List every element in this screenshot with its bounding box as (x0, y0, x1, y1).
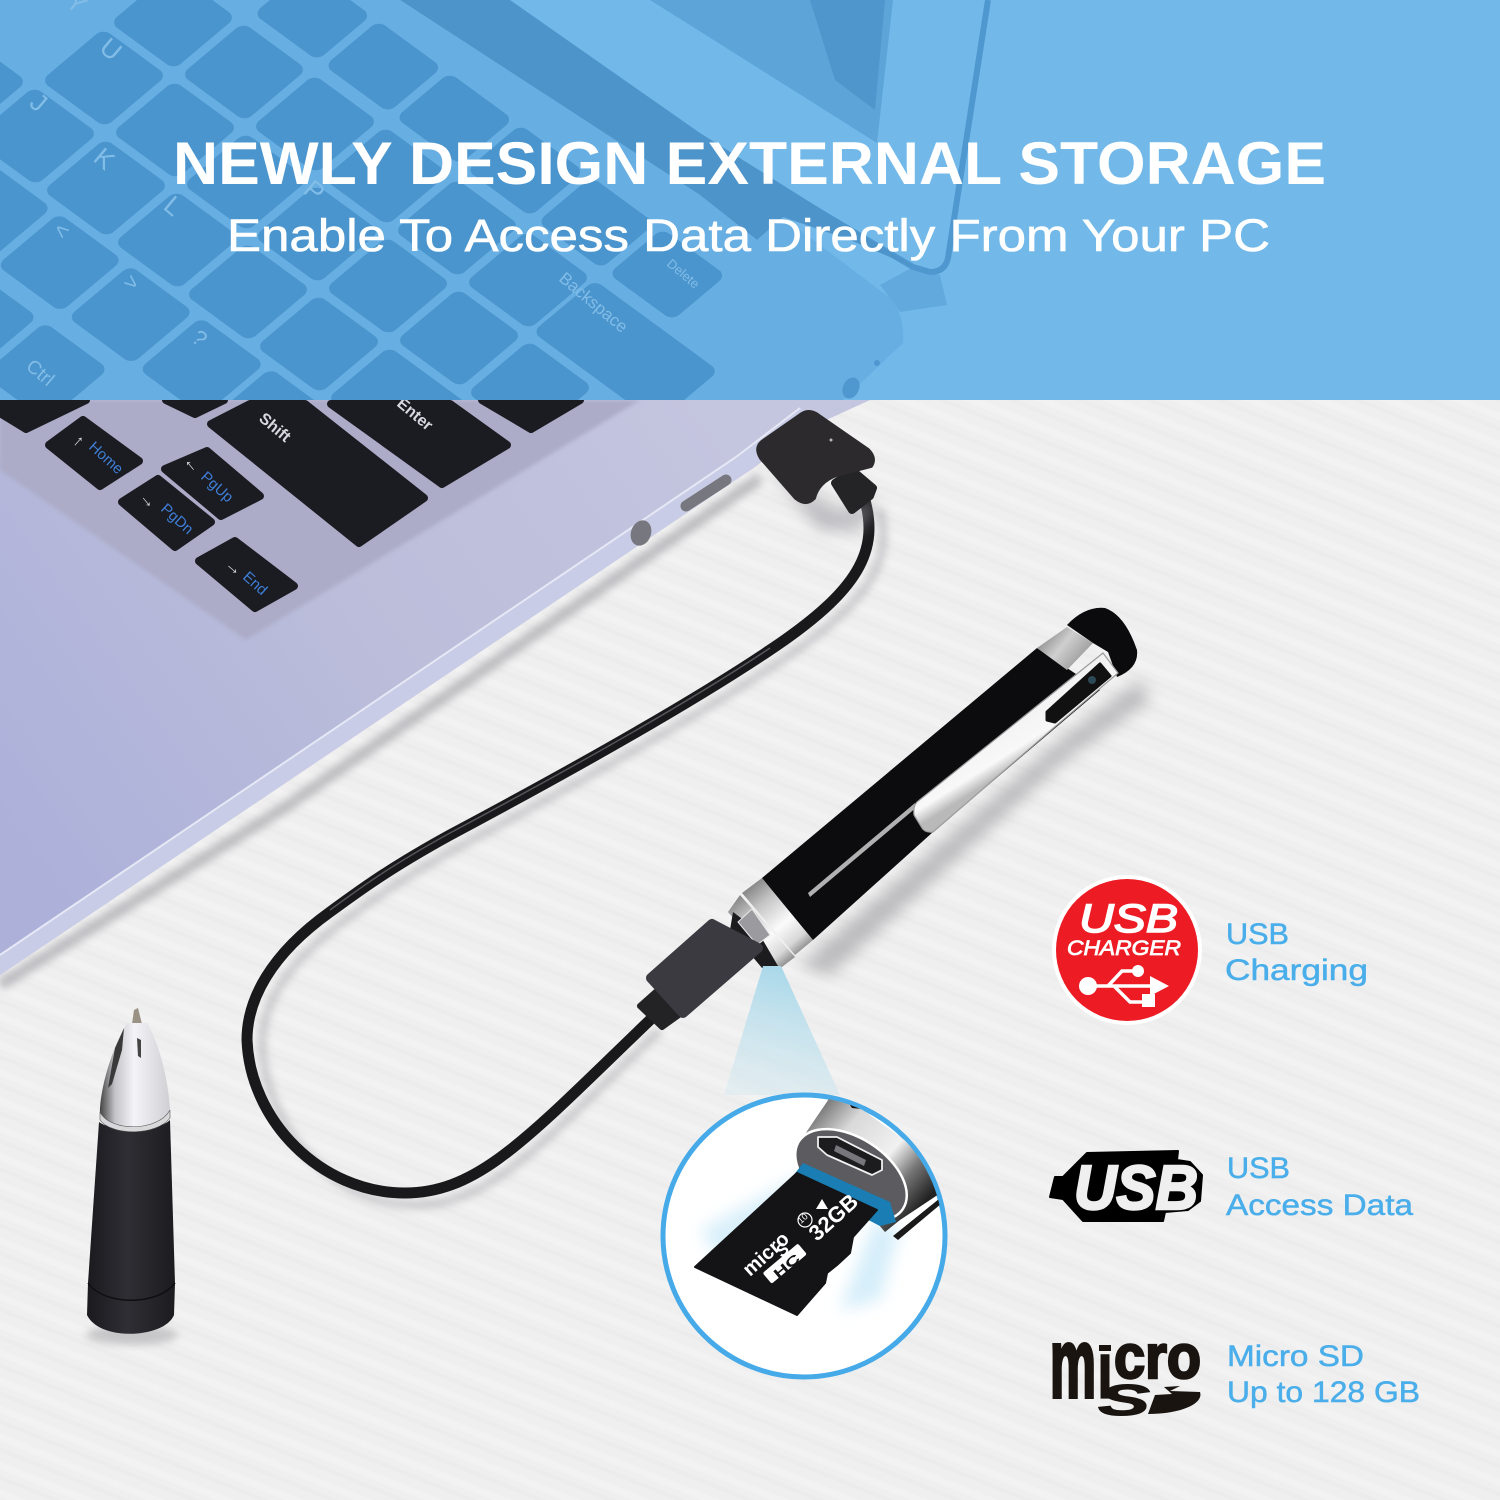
hinge shadow (400, 0, 913, 267)
HC badge (763, 1243, 807, 1284)
micro sd card: S (772, 1239, 794, 1261)
laptop screen (650, 0, 893, 143)
micro sd card (695, 1173, 877, 1315)
silver ring (742, 878, 813, 955)
spy pen body (728, 608, 1150, 975)
key legends: < (49, 217, 75, 244)
zoom beam (724, 966, 840, 1095)
label: USB charging: Charging (1225, 954, 1368, 987)
key labels: End (239, 568, 271, 599)
label: micro SD: Micro SD (1227, 1340, 1364, 1373)
cable highlight (330, 648, 770, 910)
clip slot (1047, 664, 1110, 722)
chrome cone (100, 1023, 170, 1133)
connector body (758, 412, 873, 502)
label: micro SD (1227, 1340, 1420, 1409)
pen shadow (800, 680, 1150, 975)
micro sd card: 10 (796, 1211, 810, 1225)
chrome rim (100, 1110, 170, 1132)
cap barrel (87, 1120, 175, 1334)
keys blue grid (0, 0, 722, 400)
black tip (1067, 608, 1137, 677)
banner background (0, 0, 1500, 400)
icon: USB charger badge: CHARGER (1067, 937, 1181, 960)
cap end band (88, 1283, 175, 1300)
side face strip (0, 408, 810, 975)
laptop deck (0, 400, 870, 975)
icon: USB charger badge (1052, 875, 1202, 1025)
keyboard keys black (0, 400, 580, 608)
callout circle: micro SD slot (663, 1090, 960, 1377)
cone reflection (108, 1028, 124, 1088)
laptop lower section (0, 395, 870, 985)
micro sd card: micro (739, 1228, 794, 1281)
label: USB access data: USB (1227, 1152, 1290, 1185)
micro sd card: 32GB (804, 1189, 863, 1246)
key labels: PgDn (157, 500, 197, 538)
pen clip (914, 653, 1118, 832)
icon: micro SD logo: cro (1114, 1323, 1201, 1392)
micro usb plug (640, 924, 758, 1027)
key legends: ? (187, 325, 212, 352)
cable line (247, 497, 869, 1193)
cable (247, 497, 883, 1205)
key labels: Shift (255, 410, 294, 446)
usb connector (758, 412, 880, 530)
micro sd card: HC (770, 1250, 804, 1281)
banner heading: NEWLY DESIGN EXTERNAL STORAGE (173, 130, 1326, 197)
feature: USB access data (1050, 1151, 1413, 1223)
connector shadow (770, 470, 880, 530)
connector strain relief (835, 471, 873, 510)
pen cap with ballpoint (86, 1008, 178, 1345)
key labels (69, 395, 436, 599)
blue slot light (790, 1163, 896, 1226)
key labels: ↑ (69, 431, 88, 451)
label: USB access data (1226, 1152, 1413, 1222)
key legends: U (94, 32, 128, 67)
key legends: P (298, 174, 331, 208)
icon: USB logo: USB (1074, 1154, 1198, 1223)
connector speckles (830, 438, 832, 442)
label: USB charging (1225, 918, 1368, 987)
lid corner shade (880, 267, 947, 312)
plug strain relief (640, 990, 683, 1027)
feature: USB charging (1052, 875, 1368, 1025)
keyboard deck (0, 0, 903, 400)
cap shadow (86, 1325, 178, 1345)
cable shadow (262, 510, 883, 1205)
micro usb socket (730, 912, 778, 968)
key legends: > (119, 269, 145, 296)
silver band (1037, 627, 1093, 670)
top blue banner (0, 0, 1500, 400)
key legends: L (158, 190, 189, 222)
key legends: K (88, 142, 121, 176)
label: micro SD: Up to 128 GB (1227, 1376, 1420, 1409)
micro usb opening (818, 1137, 882, 1175)
icon: micro SD logo: ı (1098, 1326, 1112, 1414)
plug body (651, 924, 758, 1013)
circle contents (699, 1099, 940, 1313)
key labels: → (221, 555, 247, 580)
laptop in banner (0, 0, 991, 400)
blue glow (699, 1172, 796, 1252)
circle fill (663, 1095, 945, 1377)
black barrel (762, 648, 1100, 940)
port holes (842, 378, 860, 398)
laptop shadow (0, 478, 760, 985)
usb port (686, 480, 726, 506)
audio port (627, 517, 655, 549)
slot face (796, 1128, 908, 1218)
ball tip (132, 1008, 142, 1024)
key legends (22, 0, 702, 391)
key labels: Home (85, 438, 126, 478)
key legends: J (24, 87, 53, 118)
banner subheading: Enable To Access Data Directly From Your PC (227, 210, 1270, 261)
key labels: Enter (393, 395, 436, 434)
key legends: Delete (664, 256, 702, 291)
icon: USB charger badge: USB (1079, 897, 1178, 941)
camera lens (1088, 676, 1096, 684)
icon: micro SD logo: S (1098, 1376, 1150, 1425)
key legends: Backspace (555, 269, 631, 337)
label: USB access data: Access Data (1226, 1189, 1413, 1222)
lid edge line (800, 0, 988, 272)
threaded neck (728, 895, 795, 970)
feature: micro SD (1050, 1310, 1420, 1425)
edge highlight (0, 408, 800, 955)
key labels: PgUp (197, 468, 237, 506)
barrel highlight (808, 803, 917, 897)
icon: micro SD logo (1050, 1310, 1201, 1425)
keyboard well (0, 400, 640, 640)
icon: micro SD logo: m (1050, 1310, 1096, 1419)
key labels: ↑ (180, 455, 199, 475)
key legends: Ctrl (22, 356, 58, 391)
label: USB charging: USB (1226, 918, 1289, 951)
pen cylinder (806, 1099, 937, 1232)
key labels: ↓ (136, 491, 155, 511)
